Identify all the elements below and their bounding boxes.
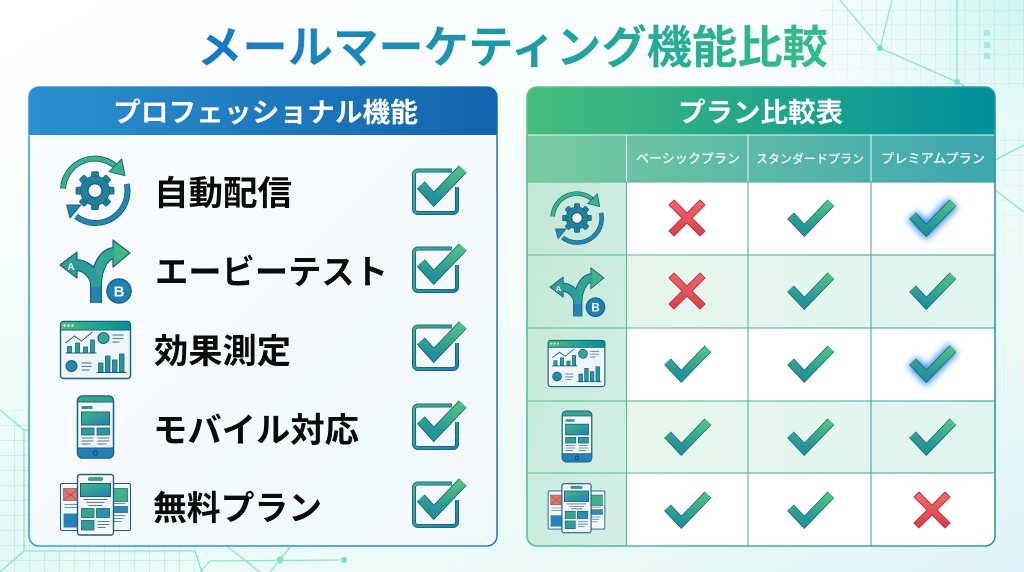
row 5 standard: yes [790,495,831,522]
icon: checkbox measurement [414,325,463,369]
icon: checkbox A/B test [414,247,463,291]
row icon: analytics dashboard [548,340,605,387]
row 5 basic: yes [668,495,708,522]
row 3 standard: yes [790,349,831,376]
row icon: automation gear [553,194,602,243]
row icon: A/B split arrows [550,268,605,316]
row 1 basic: no [669,200,705,236]
icon: A/B split arrows [60,240,131,303]
row 5 premium: no [914,492,950,528]
icon: checkbox free plan [414,482,463,526]
table column headers: スタンダードプラン [756,151,864,166]
heading: professional features [29,87,497,135]
table column headers: プレミアムプラン [881,151,985,166]
label: measurement: 効果測定 [154,333,291,371]
label: A/B test: エービーテスト [155,254,388,292]
row icon: email templates [548,484,605,533]
row 3 basic: yes [668,349,708,376]
panel: plan comparison table [527,87,995,546]
table column headers [527,135,995,182]
label: automated delivery: 自動配信 [154,175,292,213]
row 1 premium: yes highlighted [912,203,953,230]
icon: automation gear [63,159,127,223]
heading: plan comparison table [527,87,995,135]
heading: professional features: プロフェッショナル機能 [113,98,418,128]
table column headers: ベーシックプラン [636,151,740,166]
row 2 basic: no [669,273,705,309]
icon: checkbox automated delivery [414,169,463,213]
title: メールマーケティング機能比較 [197,22,828,73]
row 2 premium: yes [912,276,953,303]
icon: mobile phone [78,396,114,458]
row icon: mobile phone [562,411,592,462]
row 2 standard: yes [790,276,831,303]
heading: plan comparison table: プラン比較表 [678,98,843,128]
label: mobile support: モバイル対応 [153,412,359,450]
icon: email templates [60,474,130,535]
row 3 premium: yes highlighted [912,349,953,376]
row 4 premium: yes [912,422,953,449]
table body cells [527,87,995,546]
icon: checkbox mobile support [414,404,463,448]
panel: professional features [29,87,497,546]
label: free plan: 無料プラン [153,490,322,528]
icon: analytics dashboard [60,322,130,378]
row 4 basic: yes [668,422,708,449]
row 1 standard: yes [790,203,831,230]
row 4 standard: yes [790,422,831,449]
